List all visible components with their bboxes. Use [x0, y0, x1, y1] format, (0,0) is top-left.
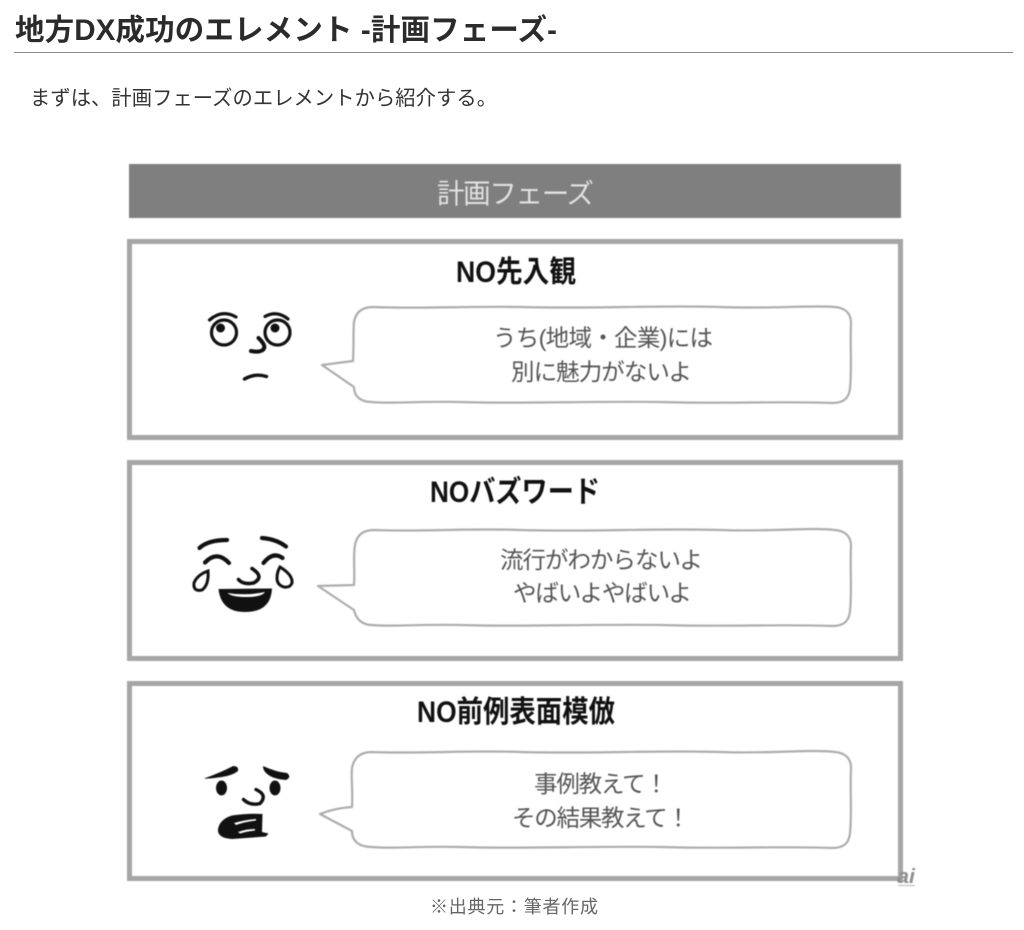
bubble text: その結果教えて！ — [512, 805, 690, 831]
bubble text — [512, 771, 690, 831]
panel: NO前例表面模倣 — [130, 684, 900, 878]
title: 地方DX成功のエレメント -計画フェーズ- — [15, 13, 557, 47]
phase header band — [129, 164, 901, 218]
heading: NOバズワード: NOバズワード — [430, 475, 600, 509]
panel: NO先入観 — [130, 242, 900, 438]
bubble text: やばいよやばいよ — [513, 580, 692, 606]
diagram — [129, 164, 915, 888]
bubble text: うち(地域・企業)には — [493, 325, 713, 351]
icon: crying laughing face — [194, 538, 292, 612]
bubble text: 別に魅力がないよ — [511, 359, 692, 385]
bubble text: 事例教えて！ — [534, 771, 668, 797]
bubble text — [493, 325, 713, 385]
speech bubble — [318, 529, 851, 626]
icon: skeptical face — [210, 314, 290, 379]
heading: NO前例表面模倣: NO前例表面模倣 — [417, 696, 615, 729]
watermark: ai logo: ai — [897, 866, 915, 888]
speech bubble — [320, 751, 851, 848]
speech bubble — [322, 306, 851, 403]
panel: NOバズワード — [130, 462, 900, 658]
heading: NO先入観: NO先入観 — [456, 256, 576, 289]
icon: worried face — [204, 766, 289, 839]
source caption: ※出典元：筆者作成 — [430, 897, 598, 917]
intro text: まずは、計画フェーズのエレメントから紹介する。 — [30, 87, 497, 110]
phase header band: 計画フェーズ — [437, 178, 594, 209]
bubble text: 流行がわからないよ — [500, 547, 703, 573]
bubble text — [500, 547, 703, 606]
